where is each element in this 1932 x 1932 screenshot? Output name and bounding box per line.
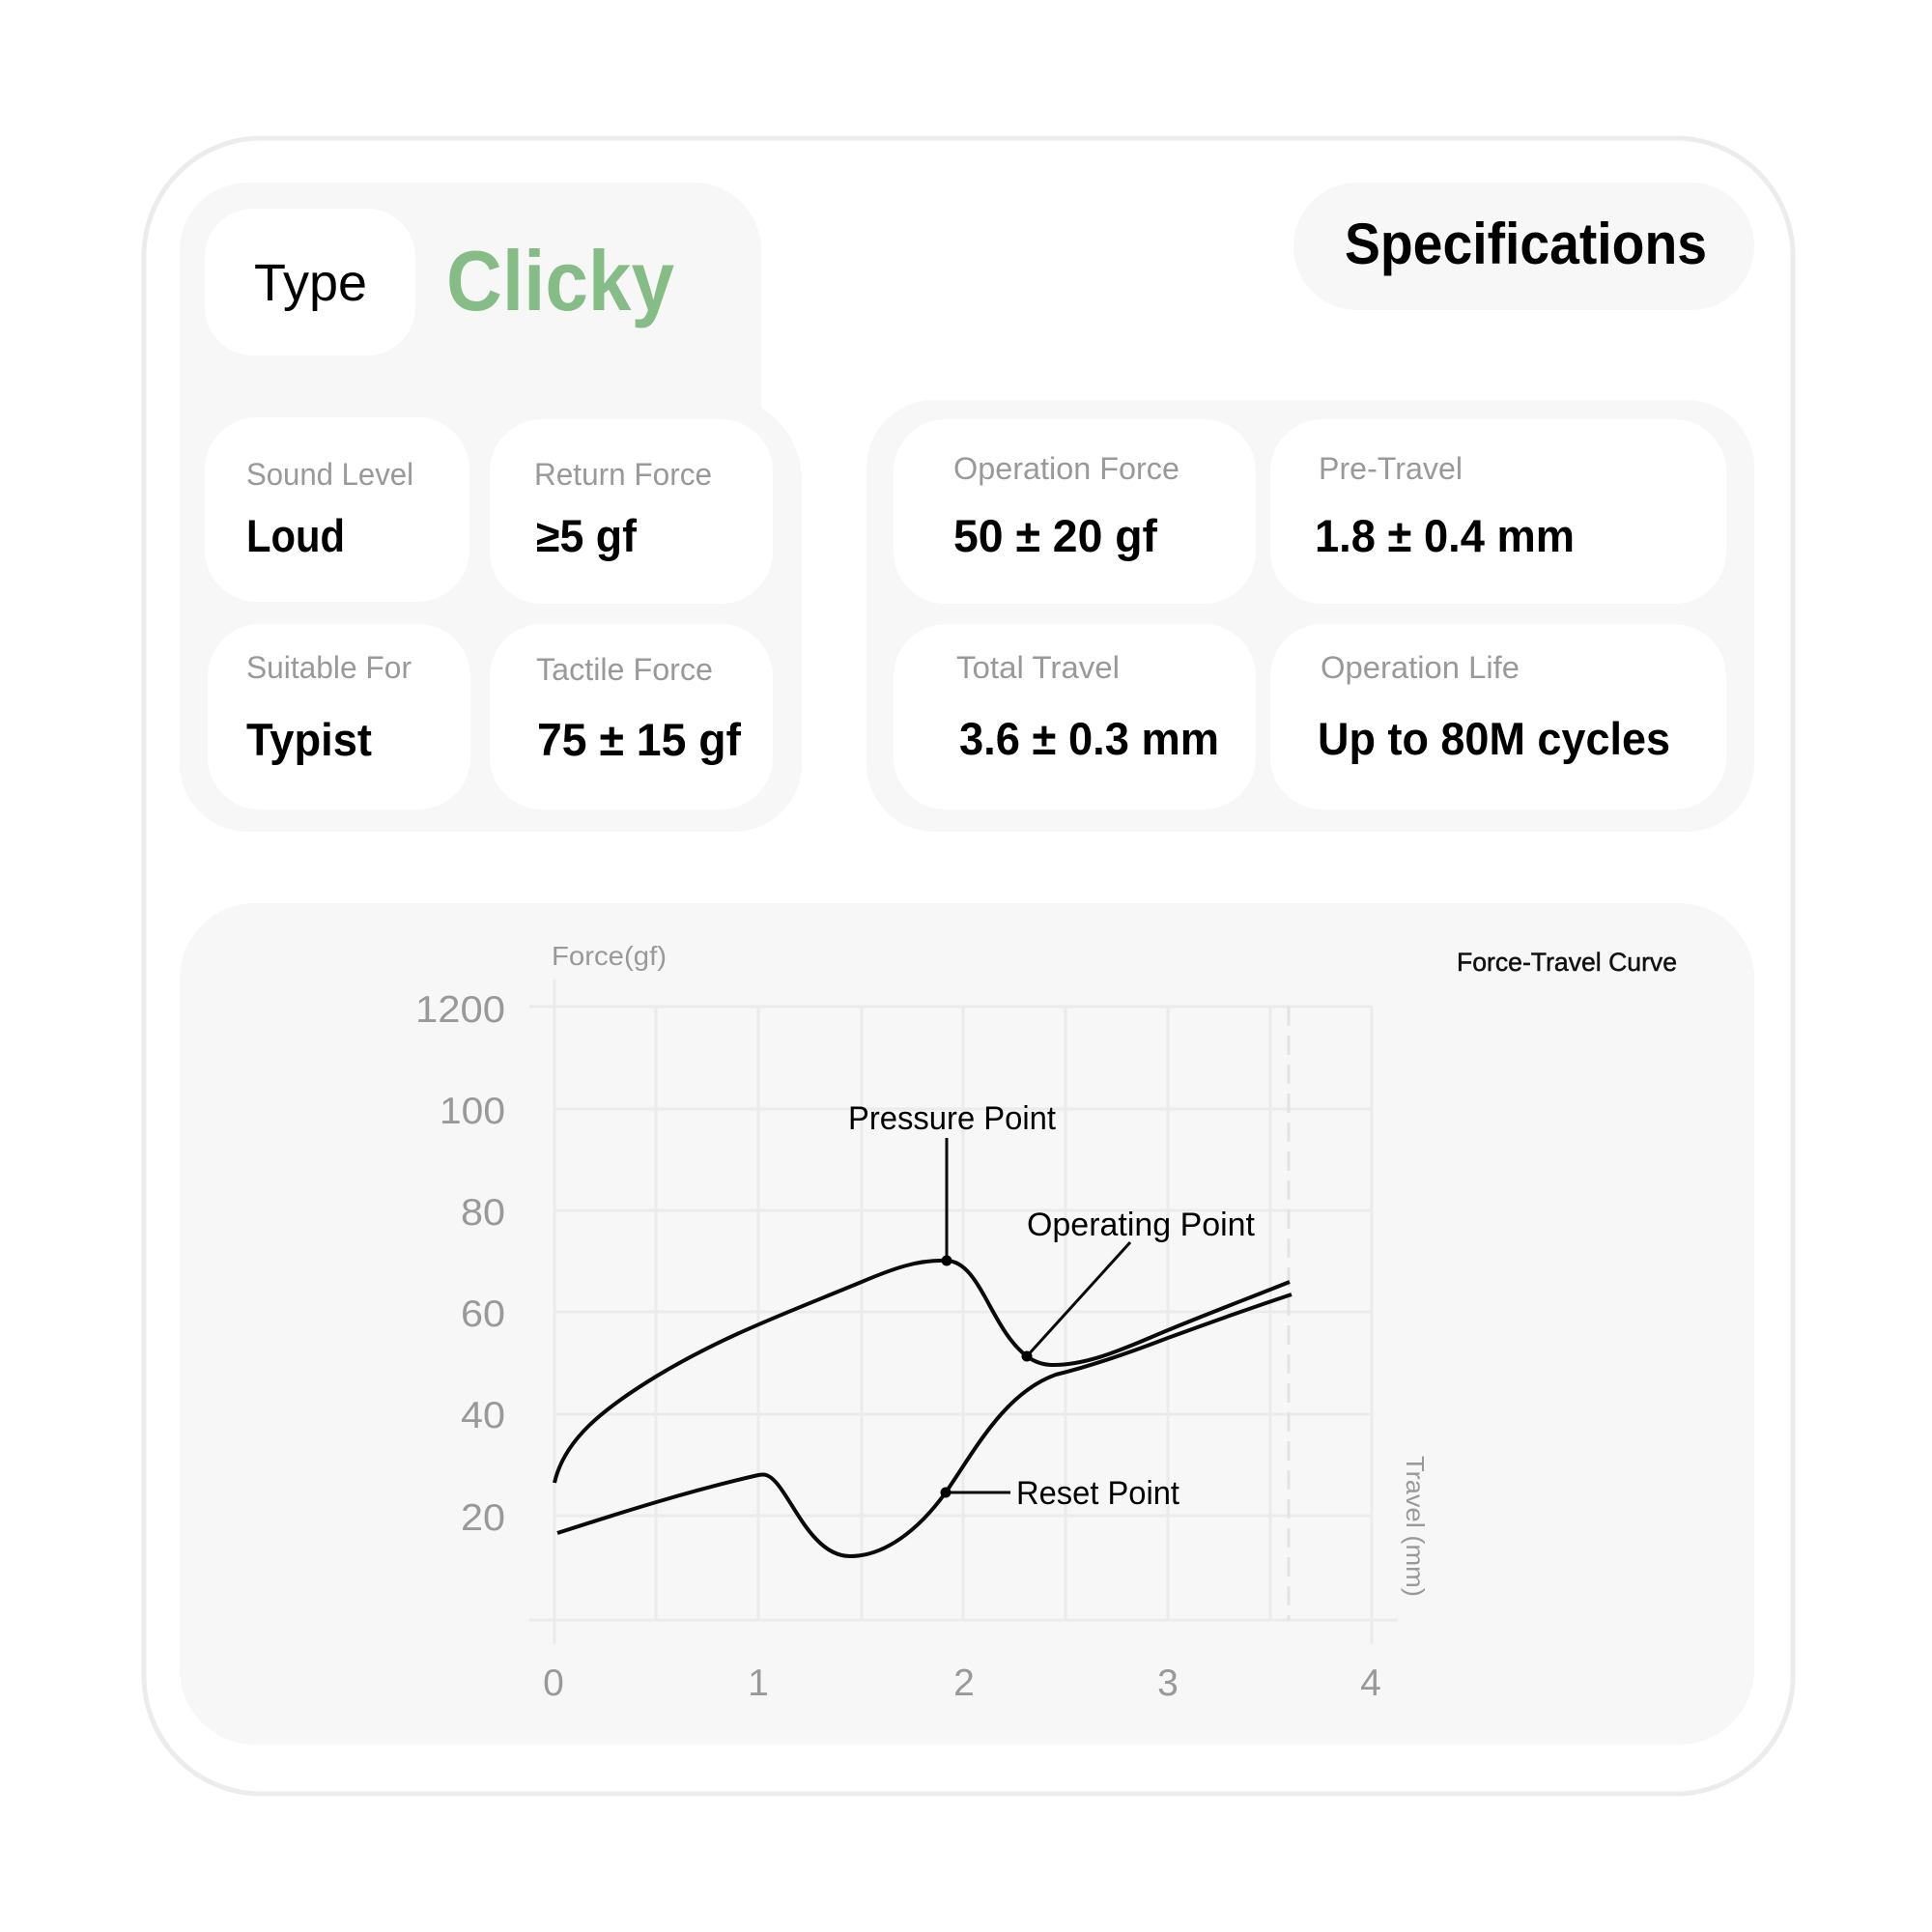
x axis labels: 2: [953, 1662, 975, 1704]
y axis labels: [415, 989, 505, 1539]
x axis labels: 3: [1157, 1662, 1179, 1704]
callout: pressure point: Pressure Point: [848, 1100, 1057, 1137]
stat card: tactile force: [490, 624, 773, 810]
chart background: [180, 903, 1754, 1745]
panel background: [180, 183, 802, 832]
spec card: operation force: 50 ± 20 gf: [953, 510, 1157, 561]
x axis labels: 1: [748, 1662, 769, 1704]
spec card: operation force: Operation Force: [953, 451, 1179, 486]
callout: reset point: [941, 1475, 1180, 1512]
type label chip: [205, 209, 415, 355]
stat card: return force: Return Force: [534, 457, 712, 492]
spec card: pre-travel: [1270, 419, 1726, 604]
spec card: pre-travel: 1.8 ± 0.4 mm: [1315, 510, 1575, 561]
callout: reset point: Reset Point: [1016, 1475, 1180, 1512]
grid lines: [529, 980, 1398, 1644]
spec card: total travel: [894, 624, 1256, 810]
heading: Specifications: Specifications: [1345, 212, 1707, 276]
stat card: sound level: Loud: [246, 510, 345, 561]
stat card: tactile force: 75 ± 15 gf: [537, 714, 741, 765]
x axis title: Travel (mm): [1401, 1456, 1430, 1597]
panel: specifications: [867, 400, 1754, 832]
y axis labels: 60: [461, 1293, 505, 1335]
stat card: tactile force: Tactile Force: [536, 652, 713, 687]
stat card: sound level: [205, 417, 469, 602]
type label chip: Type: [254, 254, 367, 312]
stat card: return force: [490, 419, 773, 604]
y axis labels: 1200: [415, 989, 505, 1031]
y axis labels: 100: [440, 1091, 505, 1132]
x axis labels: [543, 1662, 1381, 1704]
x axis labels: 0: [543, 1662, 564, 1704]
spec card: operation life: Operation Life: [1321, 650, 1520, 685]
stat card: sound level: Sound Level: [246, 457, 413, 492]
curve: return stroke: [557, 1294, 1292, 1556]
callout: operating point: Operating Point: [1027, 1207, 1256, 1243]
stat card: suitable for: Typist: [246, 714, 372, 765]
curve: actuation stroke: [554, 1261, 1290, 1483]
spec card: operation life: Up to 80M cycles: [1318, 713, 1670, 764]
callout: operating point: [1022, 1207, 1256, 1362]
spec card: total travel: Total Travel: [956, 650, 1120, 685]
y axis labels: 80: [461, 1192, 505, 1234]
panel background: [867, 400, 1754, 832]
chart title: Force-Travel Curve: [1457, 948, 1677, 977]
y axis labels: 20: [461, 1497, 505, 1539]
spec card: total travel: 3.6 ± 0.3 mm: [959, 713, 1219, 764]
type value: Clicky: Clicky: [446, 233, 674, 328]
stat card: suitable for: Suitable For: [246, 650, 412, 685]
spec card: pre-travel: Pre-Travel: [1319, 451, 1463, 486]
y axis labels: 40: [461, 1395, 505, 1436]
outer card frame: [144, 138, 1793, 1794]
spec card: operation force: [894, 419, 1256, 604]
callout: pressure point: [848, 1100, 1057, 1265]
spec card: operation life: [1270, 624, 1726, 810]
panel: force-travel chart: [180, 903, 1754, 1745]
stat card: return force: ≥5 gf: [536, 510, 637, 561]
y axis title: Force(gf): [552, 941, 667, 971]
x axis labels: 4: [1360, 1662, 1381, 1704]
panel: switch type and properties: [180, 183, 802, 832]
stat card: suitable for: [208, 624, 470, 810]
heading: Specifications: [1293, 183, 1754, 310]
